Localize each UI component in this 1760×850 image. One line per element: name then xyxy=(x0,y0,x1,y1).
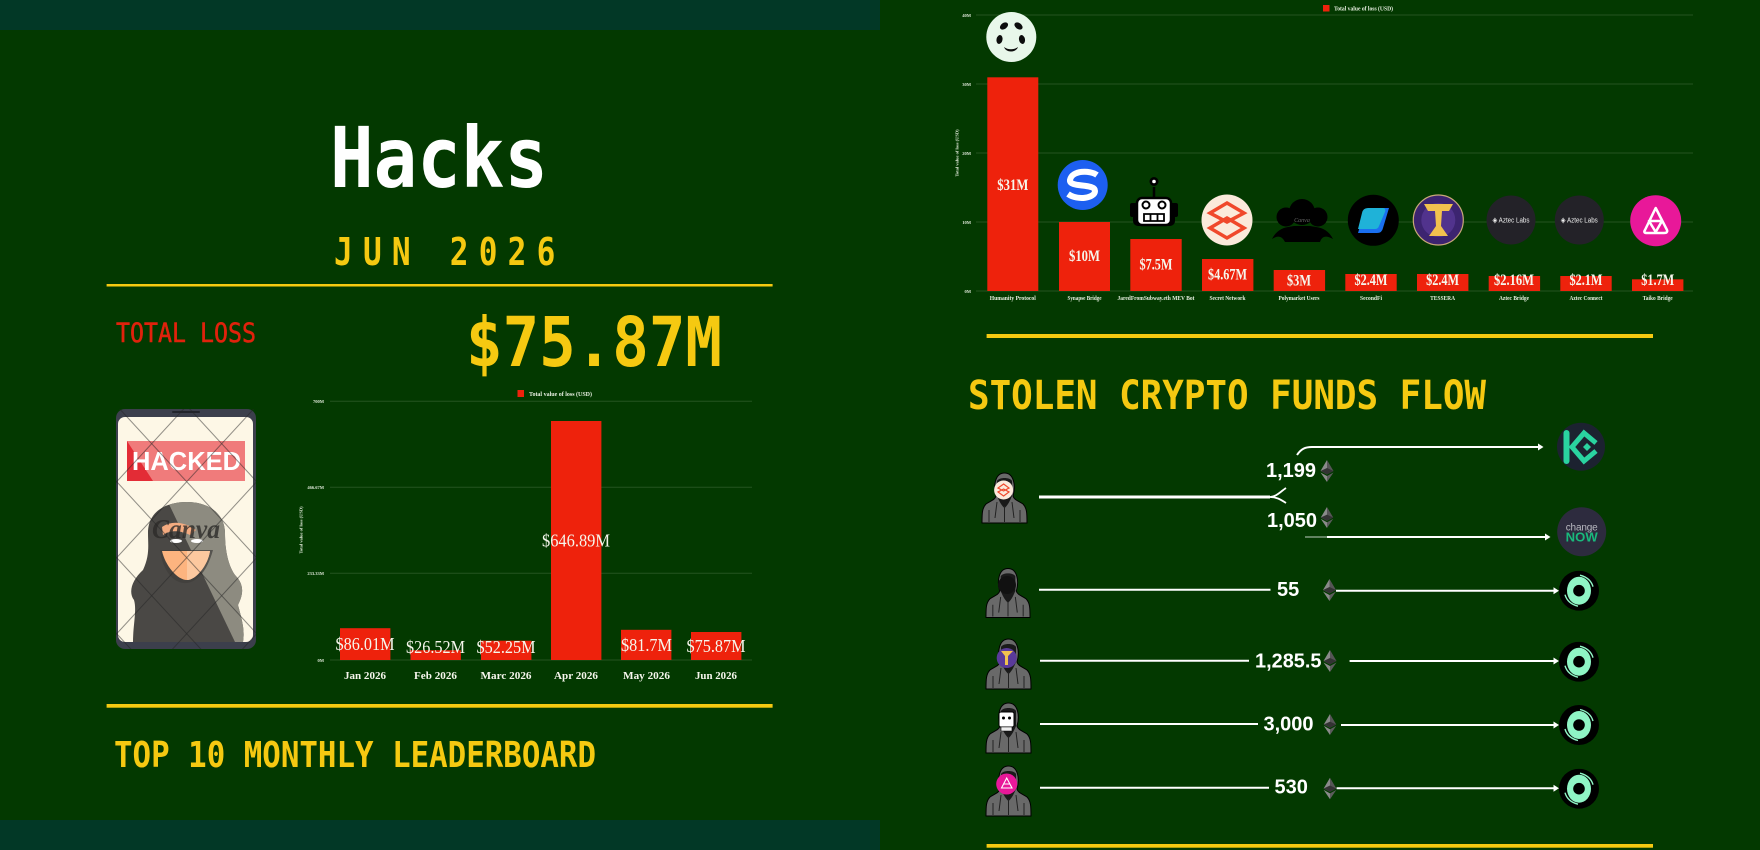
amount 530: 530 xyxy=(1274,777,1308,799)
flow: masked hacker, 55 ETH xyxy=(986,569,1599,617)
category labels: Taiko Bridge xyxy=(1643,295,1673,302)
arrow xyxy=(1341,722,1559,728)
subtitle: month: JUN 2026 xyxy=(334,231,555,275)
category labels: Humanity Protocol xyxy=(990,295,1036,302)
bar chart: monthly total loss: 466.67M xyxy=(307,485,325,490)
flow: TESSERA hacker, 1,285.5 ETH xyxy=(986,639,1599,689)
bar values: $7.5M xyxy=(1140,256,1172,274)
amount 1,285.5: 1,285.5 xyxy=(1255,650,1322,672)
bar values: $4.67M xyxy=(1208,266,1247,283)
icon: Aztec Labs (Aztec Connect): ◈ Aztec Labs xyxy=(1561,216,1598,224)
bar chart: top 10 hacks: 30M xyxy=(962,82,972,87)
bar values: $10M xyxy=(1069,248,1100,265)
bar values: $2.16M xyxy=(1494,272,1534,289)
arrow xyxy=(1337,785,1559,792)
category labels: TESSERA xyxy=(1430,295,1455,302)
category labels: Secret Network xyxy=(1210,295,1246,302)
legend: Total value of loss (USD) xyxy=(1334,6,1393,12)
legend: Total value of loss (USD) xyxy=(529,391,592,398)
bars xyxy=(340,421,741,660)
bar chart: top 10 hacks: 40M xyxy=(962,13,972,18)
bar values: $1.7M xyxy=(1641,272,1674,289)
bar values: $646.89M xyxy=(542,531,610,551)
icon: Taiko xyxy=(1630,195,1681,246)
y axis title: Total value of loss (USD) xyxy=(298,506,304,554)
month labels: Feb 2026 xyxy=(414,670,457,682)
icon: ChangeNOW: change xyxy=(1566,522,1598,534)
hacked banner: HACKED xyxy=(132,446,241,476)
month labels xyxy=(344,670,737,682)
bar chart: top 10 hacks: 0M xyxy=(964,289,972,294)
bar chart: monthly total loss: 233.33M xyxy=(307,571,325,576)
icon: destination mixer xyxy=(1559,769,1599,809)
category labels xyxy=(990,295,1673,302)
category labels: Synapse Bridge xyxy=(1068,295,1102,302)
bar values: $2.4M xyxy=(1354,272,1388,289)
flow: robot hacker, 3,000 ETH xyxy=(986,703,1599,753)
bar values xyxy=(997,177,1674,289)
month labels: Jun 2026 xyxy=(695,670,737,682)
bar chart: top 10 hacks: 10M xyxy=(962,220,972,225)
amount 3,000 xyxy=(1264,714,1336,736)
hooded figure xyxy=(131,502,244,642)
bar values: $75.87M xyxy=(686,636,746,656)
icon: Aztec Labs (Aztec Connect) xyxy=(1555,196,1604,244)
amount 1,050: 1,050 xyxy=(1267,510,1317,532)
total loss label: TOTAL LOSS xyxy=(116,318,256,349)
heading: stolen crypto funds flow: STOLEN CRYPTO FUNDS FLOW xyxy=(968,373,1487,419)
hacker icon xyxy=(986,703,1031,753)
bar chart: top 10 hacks xyxy=(954,5,1693,302)
bar values: $2.1M xyxy=(1570,272,1602,289)
bar values: $31M xyxy=(997,177,1028,194)
amount 1,199: 1,199 xyxy=(1266,460,1316,482)
icon: Polymarket users: Canva xyxy=(1294,218,1310,224)
icon: ChangeNOW: NOW xyxy=(1566,531,1598,545)
amount 3,000: 3,000 xyxy=(1264,714,1314,736)
flow: Taiko hacker, 530 ETH xyxy=(986,766,1599,816)
split arrow xyxy=(1039,447,1546,537)
icon: Secret Network xyxy=(1202,194,1252,246)
bar values: $3M xyxy=(1287,272,1311,289)
bar values: $2.4M xyxy=(1426,272,1459,289)
bar values: $26.52M xyxy=(406,637,465,657)
bar chart: monthly total loss: 0M xyxy=(318,658,325,663)
hacker icon xyxy=(986,569,1030,617)
icon: ChangeNOW xyxy=(1557,507,1606,556)
watermark: Canva xyxy=(152,514,220,544)
icon: destination mixer xyxy=(1559,642,1599,682)
arrow xyxy=(1336,587,1559,594)
y axis title: Total value of loss (USD) xyxy=(954,129,960,177)
icon: robot xyxy=(1130,177,1178,226)
amount 55 xyxy=(1277,579,1336,601)
category labels: Polymarket Users xyxy=(1278,295,1320,302)
bar chart: monthly total loss xyxy=(298,390,752,682)
legend xyxy=(1323,5,1393,12)
icon: Polymarket users xyxy=(1272,199,1333,242)
icon: Aztec Labs (Aztec Bridge): ◈ Aztec Labs xyxy=(1492,216,1530,224)
icon: hacked phone xyxy=(116,409,262,649)
title: Hacks xyxy=(330,109,548,207)
amount 55: 55 xyxy=(1277,579,1299,601)
bar values: $81.7M xyxy=(621,635,672,655)
category labels: Aztec Connect xyxy=(1570,295,1603,302)
month labels: May 2026 xyxy=(623,670,671,682)
amount 530 xyxy=(1274,777,1336,799)
category labels: Aztec Bridge xyxy=(1499,295,1529,302)
month labels: Jan 2026 xyxy=(344,670,386,682)
icon: destination mixer xyxy=(1559,705,1599,745)
icon: Synapse xyxy=(1058,160,1108,210)
total loss value: $75.87M xyxy=(466,303,722,383)
arrow xyxy=(1350,658,1559,664)
icon: SecondFi xyxy=(1348,195,1399,246)
icon: KuCoin xyxy=(1557,423,1605,471)
top band xyxy=(0,0,880,30)
month labels: Apr 2026 xyxy=(554,670,599,682)
hacker icon xyxy=(986,639,1031,689)
hacker icon xyxy=(986,766,1031,816)
flow: Secret Network hacker xyxy=(982,423,1606,556)
bar values: $52.25M xyxy=(476,637,536,657)
bar values: $86.01M xyxy=(336,634,394,654)
month labels: Marc 2026 xyxy=(480,670,532,682)
category labels: JaredFromSubway.eth MEV Bot xyxy=(1118,295,1195,302)
icon: TESSERA xyxy=(1413,195,1463,245)
hacker icon xyxy=(982,473,1027,523)
bar chart: monthly total loss: 700M xyxy=(313,399,325,404)
icon: Humanity Protocol xyxy=(986,12,1036,62)
heading: leaderboard: TOP 10 MONTHLY LEADERBOARD xyxy=(114,735,596,776)
bars xyxy=(987,77,1683,291)
bar chart: top 10 hacks: 20M xyxy=(962,151,972,156)
icon: Aztec Labs (Aztec Bridge) xyxy=(1486,196,1536,244)
category labels: SecondFi xyxy=(1360,295,1382,302)
amount 1,050 xyxy=(1267,507,1333,532)
legend xyxy=(518,390,592,398)
bar values xyxy=(336,531,746,657)
icon: destination mixer xyxy=(1559,571,1599,611)
bottom band xyxy=(0,820,880,850)
